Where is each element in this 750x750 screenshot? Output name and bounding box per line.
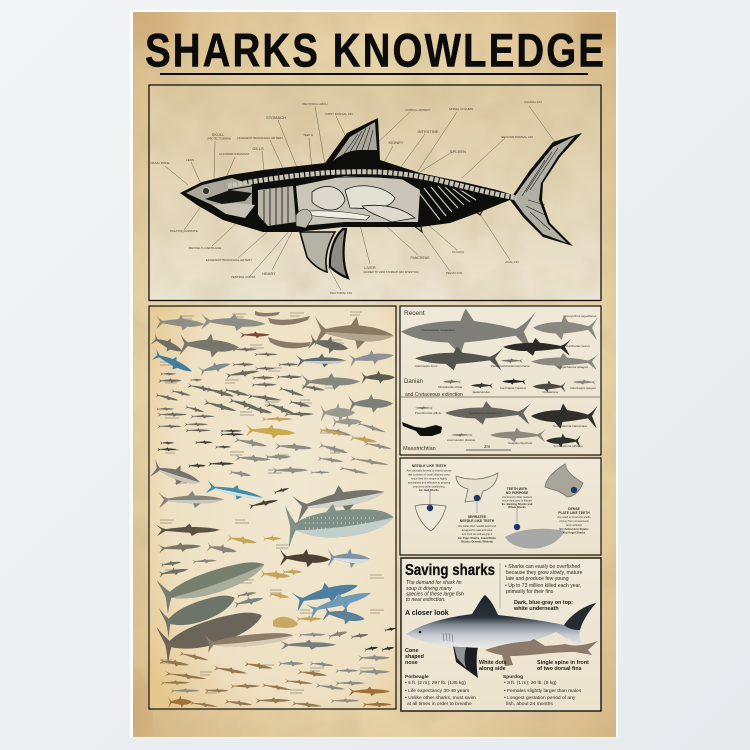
species facts: spurdog: • Longest gestation period of any xyxy=(504,695,576,701)
teeth titles and text xyxy=(407,464,591,544)
basking shark xyxy=(313,314,395,352)
icon: serrated tooth xyxy=(456,473,498,502)
silhouette labels: Carcharias hopkinsi xyxy=(500,386,526,390)
intro text xyxy=(406,580,464,603)
callout labels: of two dorsal fins xyxy=(537,666,582,672)
anatomy labels: TEETH xyxy=(303,133,313,137)
anatomy labels: LENS xyxy=(186,158,194,162)
spurdog illustration xyxy=(485,639,598,666)
teeth titles and text: Sharks, Oceanic Whitetip xyxy=(461,540,493,544)
teeth titles and text: since their thin shape is highly xyxy=(411,476,448,480)
species facts: spurdog: • Females slightly larger than males xyxy=(504,688,582,694)
teeth titles and text: SERRATED xyxy=(468,515,487,519)
intro text: soup is driving many xyxy=(406,586,452,592)
subheading: A closer look xyxy=(405,610,449,617)
teeth titles and text: designed to saw and slice xyxy=(462,528,493,532)
callout labels: shaped xyxy=(405,654,424,660)
callout labels: along side xyxy=(479,666,506,672)
silhouette labels: Cretalamna xyxy=(542,390,558,394)
species facts: spurdog: Spurdog xyxy=(503,674,523,680)
teeth titles and text: Ex: Basking Sharks and xyxy=(502,502,533,506)
whale shark xyxy=(285,502,395,549)
anatomy labels: STOMACH xyxy=(266,115,286,120)
anatomy labels: PELVIC FIN xyxy=(446,271,462,275)
panel: shark anatomy xyxy=(149,85,601,300)
anatomy labels: FIRST DORSAL FIN xyxy=(325,112,353,116)
silhouette labels: Odontaspis ferox xyxy=(415,364,438,368)
anatomy labels: PALATOQUADRATE xyxy=(170,229,198,233)
anatomy labels: PANCREAS xyxy=(410,256,430,260)
icon: plate tooth xyxy=(545,464,583,497)
anatomy labels: EFFERENT BRANCHIAL ARTERY xyxy=(206,258,252,262)
species facts: spurdog: fish, about 24 months xyxy=(506,701,553,707)
silhouette labels: Odontaspis speyeri xyxy=(570,386,596,390)
great white shark xyxy=(291,478,387,522)
anatomy labels: CAUDAL FIN xyxy=(524,100,542,104)
silhouette labels: Carcharias taurus xyxy=(566,344,590,348)
species facts: porbeagle: Porbeagle xyxy=(405,674,429,680)
anatomy labels: NASAL BONE xyxy=(150,161,170,165)
anatomy labels: CLOACA xyxy=(452,250,464,254)
species facts: porbeagle: at all times in order to breathe xyxy=(407,701,472,707)
anatomy labels: HEART xyxy=(262,271,276,276)
callout labels: Cone xyxy=(405,648,418,654)
silhouette labels: Striatolamia whitei xyxy=(438,385,463,389)
silhouette labels: Maastrichtian xyxy=(403,446,436,452)
overfishing bullets: primarily for their fins xyxy=(506,589,554,595)
teeth titles and text: Are found in filter feeders xyxy=(502,495,533,499)
anatomy labels: VENTRAL AORTA xyxy=(231,275,255,279)
silhouette labels: Pseudocorax affinis xyxy=(415,411,442,415)
teeth titles and text: Ex: Tiger Sharks, Great White xyxy=(458,536,496,540)
panel: teeth types xyxy=(400,458,601,555)
porbeagle shark illustration xyxy=(406,595,596,678)
silhouette labels: Recent xyxy=(404,310,425,317)
intro text: The demand for shark fin xyxy=(406,580,462,586)
teeth titles and text: Are wider than needle teeth and xyxy=(458,524,497,528)
anatomy labels: PECTORAL ARCH xyxy=(302,102,328,106)
anatomy labels: INTESTINE xyxy=(418,129,439,134)
anatomy labels: SPINAL COLUMN xyxy=(449,107,473,111)
icon: needle tooth xyxy=(415,504,446,531)
silhouette labels: Notorynchus cepedianus xyxy=(563,314,597,318)
species facts: porbeagle: • 6 ft. (2 m); 297 lb. (135 kg) xyxy=(405,680,466,686)
species facts: spurdog: • 3 ft. (1 m); 20 lb. (9 kg) xyxy=(504,680,557,686)
overfishing bullets: late and produce few young xyxy=(506,576,569,582)
numbered badges xyxy=(427,487,577,530)
callout labels: white underneath xyxy=(513,606,559,612)
anatomy labels: AFFERENT BRANCHIAL ARTERY xyxy=(237,136,283,140)
silhouettes xyxy=(401,309,598,447)
teeth titles and text: PLATE LIKE TEETH xyxy=(558,511,590,515)
silhouette labels: Squalicorax pristodontus xyxy=(469,411,502,415)
anatomy labels: GILLS xyxy=(252,146,264,151)
silhouette labels: Megachasma pelagios xyxy=(558,365,589,369)
teeth titles and text: NEEDLE LIKE TEETH xyxy=(412,464,447,468)
species facts: porbeagle: • Life expectancy 30-40 years xyxy=(405,688,470,694)
organs xyxy=(296,176,420,226)
teeth titles and text: Ex: Zebra Horn Sharks xyxy=(560,527,589,531)
silhouette labels: Jaekelotodus xyxy=(472,390,490,394)
teeth titles and text: NEEDLE LIKE TEETH xyxy=(460,519,495,523)
large sharks lower half xyxy=(156,524,397,666)
silhouette labels: Danian xyxy=(404,379,423,385)
callout labels: White dots xyxy=(479,660,507,666)
silhouette labels: Scapanorhynchus xyxy=(508,441,533,445)
teeth titles and text: Are used to crush the shells xyxy=(557,515,591,519)
anatomy labels xyxy=(150,100,542,295)
overfishing bullets: • Up to 73 million killed each year, xyxy=(505,583,581,589)
icon: scuba diver xyxy=(402,422,442,436)
skull and jaw xyxy=(186,178,252,214)
silhouette labels: Carcharocles megalodon xyxy=(421,328,455,332)
teeth titles and text: onto prey while swallowing. xyxy=(413,484,446,488)
species facts: porbeagle: • Unlike other sharks, must swim xyxy=(405,695,476,701)
species facts: porbeagle xyxy=(405,674,476,707)
panel: saving sharks xyxy=(401,558,601,711)
silhouette labels xyxy=(403,310,597,452)
title: SHARKS KNOWLEDGE xyxy=(145,25,604,77)
anatomy labels: KIDNEY xyxy=(389,140,404,145)
callout labels: nose xyxy=(405,660,418,666)
teeth titles and text: and Angel Sharks xyxy=(563,530,586,534)
anatomy labels: CHONDROCRANIUM xyxy=(219,152,249,156)
patterned catsharks bottom rows xyxy=(159,650,392,709)
teeth titles and text: diet consists of small, slippery prey, xyxy=(408,472,450,476)
teeth titles and text: specialized and effective at gripping xyxy=(408,480,451,484)
spine xyxy=(228,172,517,198)
silhouette labels: Serratolamna maroccana xyxy=(553,424,587,428)
teeth leader lines xyxy=(430,491,517,523)
panel: size comparison silhouettes xyxy=(400,306,601,455)
anatomy labels: SKULL xyxy=(212,132,225,137)
teeth titles and text: into food as well as grip it xyxy=(462,532,492,536)
scale bar: 2m xyxy=(484,444,491,449)
teeth titles and text: NO PURPOSE xyxy=(506,491,529,495)
overfishing bullets xyxy=(505,564,583,595)
anatomy labels: ANAL FIN xyxy=(505,260,519,264)
rib bands xyxy=(417,186,476,220)
anatomy labels: LIVER xyxy=(364,265,376,270)
icon: filter teeth xyxy=(505,529,565,549)
overfishing bullets: because they grow slowly, mature xyxy=(506,570,583,576)
teeth titles and text: of prey from crustaceans xyxy=(559,519,589,523)
anatomy labels: (PROTECTS BRAIN) xyxy=(207,138,231,140)
large sharks upper half xyxy=(149,312,395,508)
silhouette labels: Anomotodon plicatus xyxy=(447,438,476,442)
anatomy labels: SECOND DORSAL FIN xyxy=(501,135,533,139)
poster paper background xyxy=(116,4,630,746)
anatomy labels: PECTORAL FIN xyxy=(330,291,352,295)
title underline xyxy=(160,73,588,75)
anatomical shark illustration xyxy=(180,118,582,278)
teeth titles and text: DENSE xyxy=(568,507,581,511)
teeth titles and text: Ex: Bull Sharks xyxy=(419,488,439,492)
small sharks rows xyxy=(155,311,392,622)
teeth titles and text: Whale Sharks xyxy=(508,505,526,509)
teeth titles and text: and mollusks xyxy=(566,523,582,527)
anatomy labels: (GUIDED TO VIEW STOMACH AND INTESTINE) xyxy=(363,271,419,274)
teeth titles and text: Are optimally formed to sharks whose xyxy=(407,468,452,472)
leader lines xyxy=(165,106,557,290)
silhouette labels: Pseudocarcharias kamoharai xyxy=(491,364,530,368)
silhouette labels: Serratolamna africana xyxy=(553,444,583,448)
species facts: spurdog xyxy=(503,674,582,707)
panel: shark species chart xyxy=(149,306,397,709)
intro text: species of these large fish xyxy=(406,592,464,598)
teeth titles and text: TEETH WITH xyxy=(507,487,528,491)
anatomy labels: SPLEEN xyxy=(450,149,466,154)
silhouette labels: and Cretaceous extinction xyxy=(405,392,463,398)
anatomy labels: MECKEL'S CARTILAGE xyxy=(189,246,221,250)
heading: Saving sharks xyxy=(405,562,495,579)
gill chamber xyxy=(258,186,296,226)
scale bar xyxy=(466,444,511,450)
hammerhead and brown catsharks xyxy=(168,696,192,708)
intro text: to near extinction. xyxy=(406,597,445,603)
anatomy labels: DORSAL ARTERY xyxy=(406,108,430,112)
fins and tail hatch xyxy=(333,122,377,161)
callout labels: Dark, blue-gray on top: xyxy=(514,600,573,606)
callout labels xyxy=(405,600,589,672)
overfishing bullets: • Sharks can easily be overfished xyxy=(505,564,580,570)
teeth titles and text: since their prey is filtered xyxy=(502,498,532,502)
species captions xyxy=(160,312,384,693)
callout labels: Single spine in front xyxy=(537,660,589,666)
